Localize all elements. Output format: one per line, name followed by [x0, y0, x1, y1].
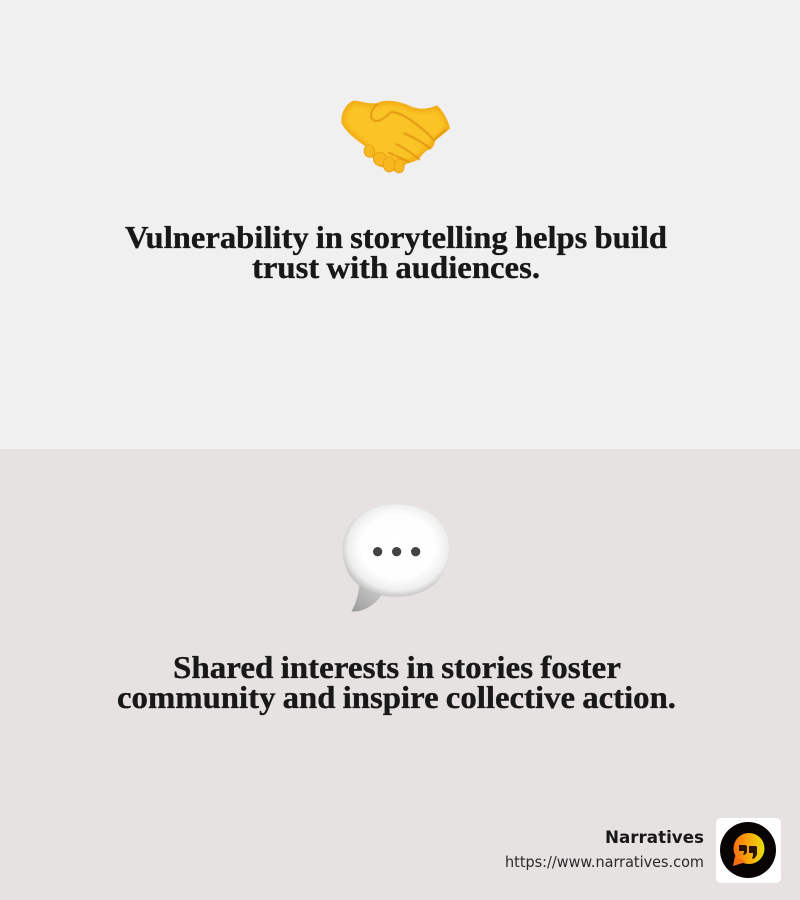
logo — [716, 818, 781, 883]
heading: community — [117, 649, 676, 715]
brand url: https://www.narratives.com — [505, 853, 704, 871]
panel: trust — [125, 100, 667, 279]
heading: trust — [125, 219, 667, 285]
icon: handshake — [341, 100, 450, 174]
heading: trust: Vulnerability in storytelling helps build — [125, 219, 667, 255]
heading: community: community and inspire collective action. — [117, 679, 676, 715]
heading: trust: trust with audiences. — [252, 249, 540, 285]
panel: community — [0, 449, 800, 900]
icon: speech bubble — [343, 505, 449, 612]
brand block — [505, 818, 781, 883]
brand name: Narratives — [605, 828, 704, 848]
heading: community: Shared interests in stories foster — [173, 649, 621, 685]
